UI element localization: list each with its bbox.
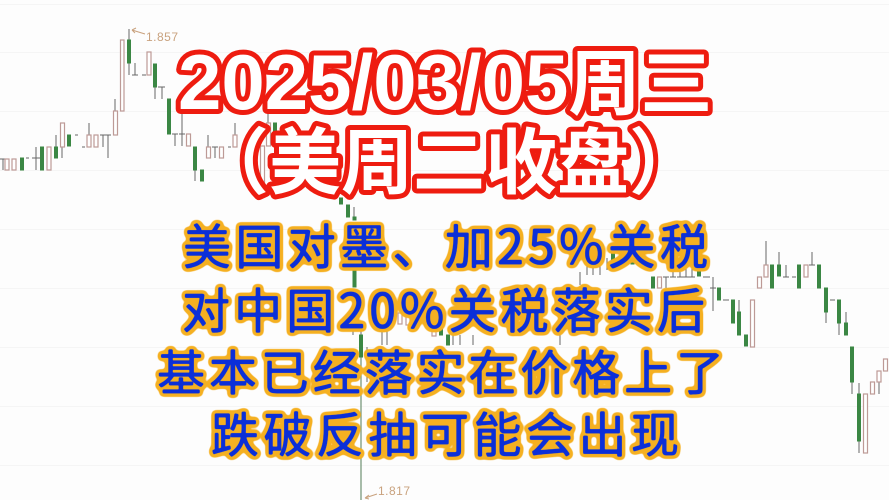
price label: high 1.857: 1.857 xyxy=(146,30,179,44)
line 3: 基本已经落实在价格上了 xyxy=(157,334,724,404)
title: US close note: （美周二收盘） xyxy=(197,104,701,209)
candles: left rally xyxy=(0,29,276,186)
line 2: 对中国20%关税落实后 xyxy=(182,272,705,342)
candles: centre sell-off xyxy=(340,198,607,500)
text block: tariff commentary xyxy=(157,208,724,466)
price label: low 1.817 xyxy=(365,484,411,499)
price label: high 1.857 xyxy=(132,28,179,44)
candles: right section xyxy=(612,241,888,453)
title: date: 2025/03/05周三 xyxy=(178,25,712,130)
line 1: 美国对墨、加25%关税 xyxy=(183,208,708,278)
line 4: 跌破反抽可能会出现 xyxy=(211,396,679,466)
price label: low 1.817: 1.817 xyxy=(378,484,411,498)
